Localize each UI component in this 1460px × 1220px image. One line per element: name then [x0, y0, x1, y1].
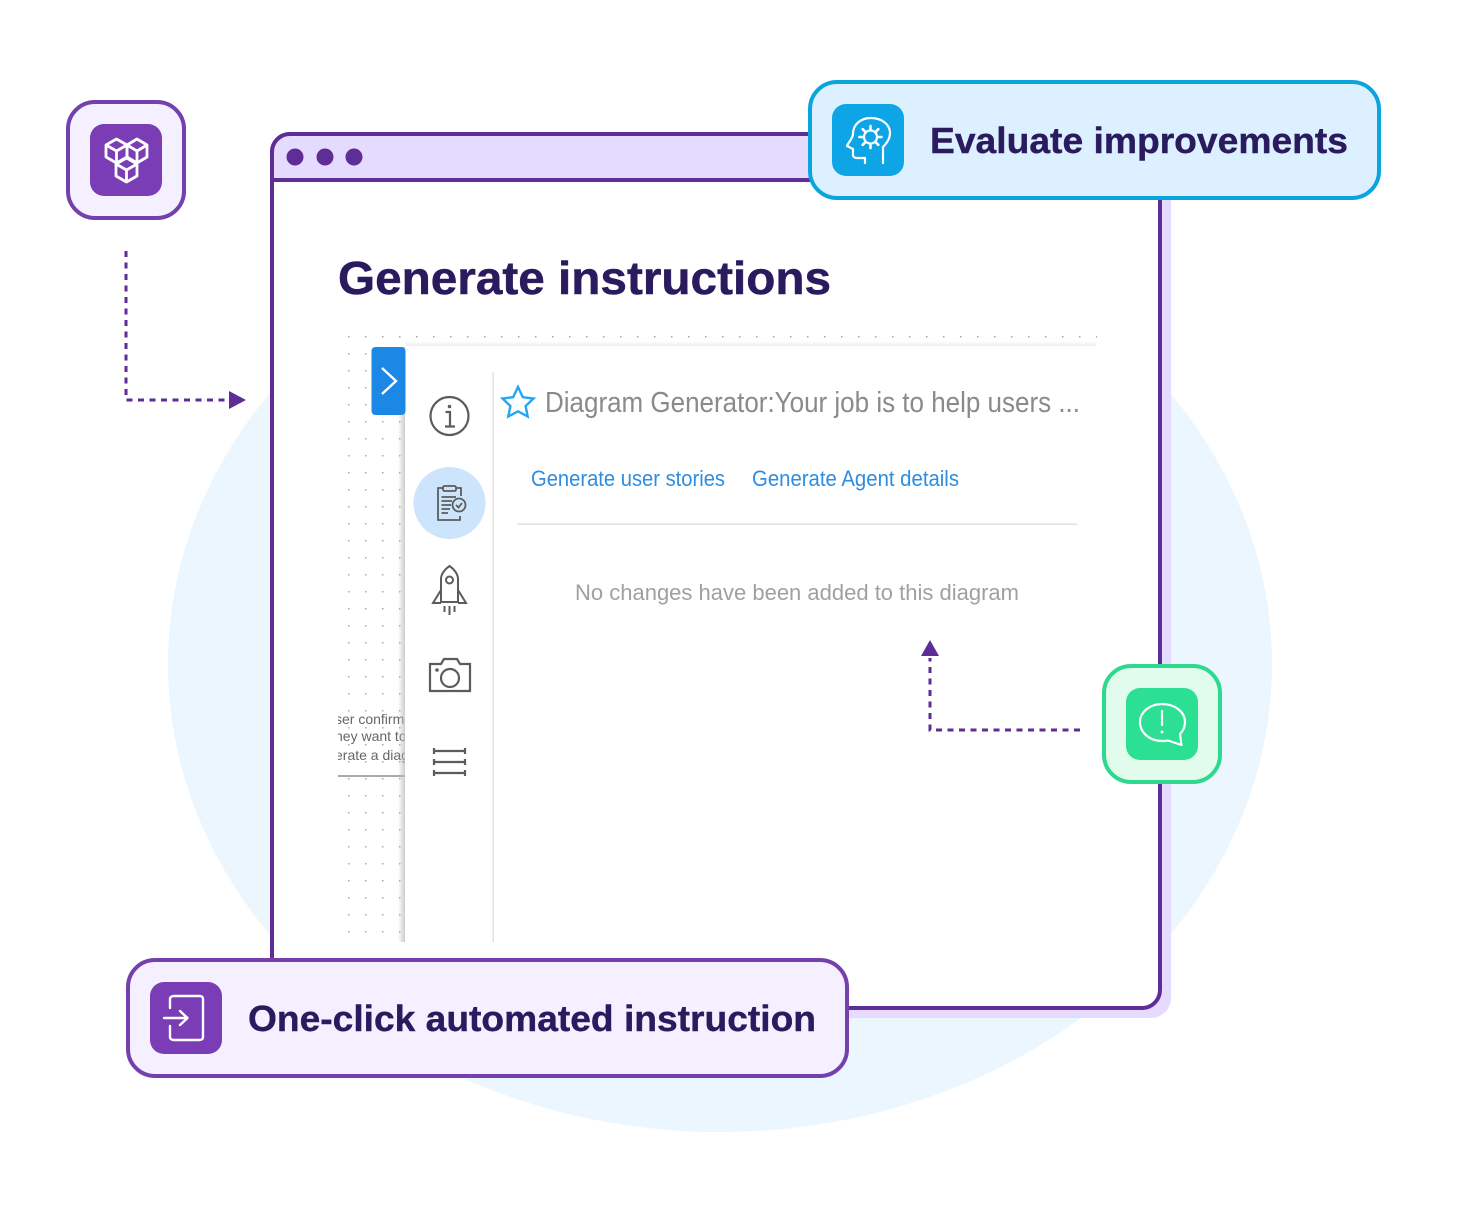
tab: Generate user stories: Generate user stories: [531, 466, 725, 491]
panel: browser window: [272, 134, 1171, 1018]
window title bar: [272, 134, 1160, 180]
icon: info: [430, 397, 468, 435]
background circle: [168, 196, 1272, 1132]
panel: app screenshot: [335, 334, 1097, 943]
icon: list lines: [434, 748, 465, 776]
icon: enter: [164, 996, 203, 1040]
agent title: Diagram Generator:Your job is to help users ...: [545, 387, 1080, 419]
badge: cubes: [68, 102, 184, 218]
icon: camera: [430, 659, 470, 691]
callout: One-click automated instruction: [128, 960, 847, 1076]
window body: [272, 134, 1160, 1008]
icon: cubes: [106, 139, 147, 182]
icon: head with gear: [847, 118, 890, 163]
callout: Evaluate improvements: [810, 82, 1379, 198]
icon: active clipboard: [414, 467, 486, 539]
cut-off canvas text: erate a diag: [335, 747, 409, 763]
badge: feedback: [1104, 666, 1220, 782]
window offset shadow: [278, 140, 1171, 1018]
arrow: feedback to screenshot: [921, 640, 1080, 730]
canvas dot grid: [345, 334, 1097, 938]
cut-off canvas text: ser confirm: [335, 711, 404, 727]
cut-off canvas text: [338, 714, 405, 777]
tabs divider: [517, 524, 1077, 525]
cut-off canvas text: hey want to: [335, 728, 407, 744]
sidebar divider: [492, 372, 494, 942]
empty state message: No changes have been added to this diagram: [575, 580, 1019, 605]
label: One-click automated instruction: [248, 998, 816, 1039]
collapse tab: [372, 347, 406, 415]
icon: speech bubble alert: [1140, 704, 1185, 745]
arrow: cubes to window: [126, 251, 246, 409]
label: Evaluate improvements: [930, 120, 1348, 161]
sidebar shadow: [398, 347, 405, 942]
heading: Generate instructions: Generate instructions: [338, 252, 831, 304]
icon: star: [502, 387, 534, 416]
tab: Generate Agent details: Generate Agent details: [752, 466, 959, 491]
icon: rocket: [433, 566, 466, 615]
